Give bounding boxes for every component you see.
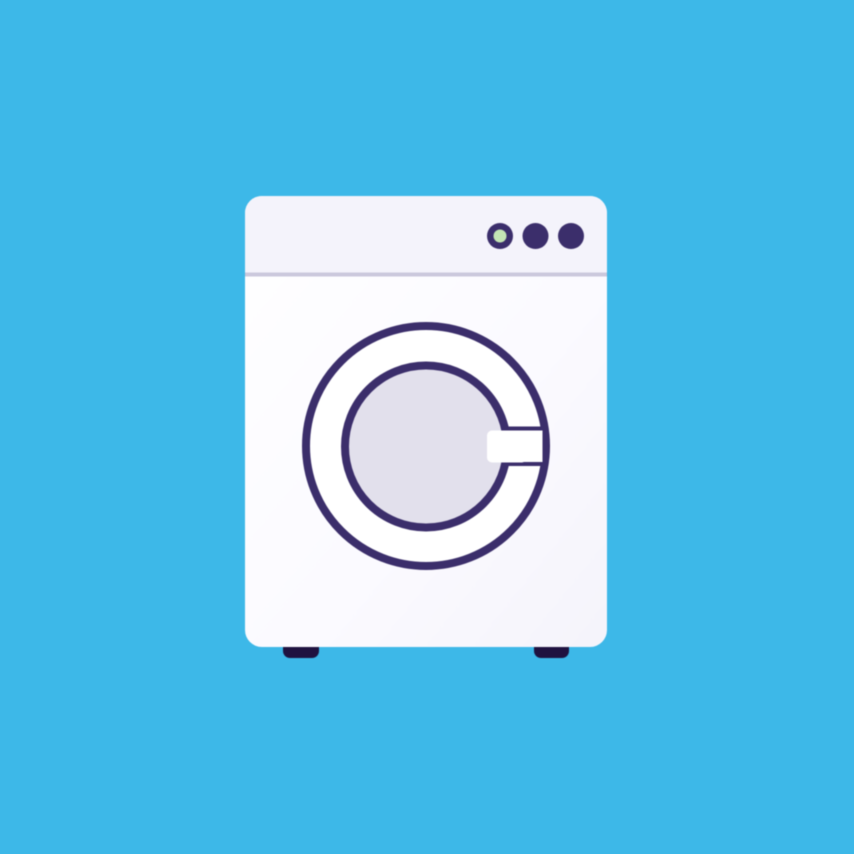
washing machine bbox=[245, 196, 607, 658]
icon: button middle bbox=[522, 223, 548, 249]
panel: control panel bbox=[245, 196, 607, 276]
icon: button right bbox=[558, 223, 584, 249]
icon: right foot bbox=[534, 640, 569, 658]
icon: left foot bbox=[283, 640, 319, 658]
door glass bbox=[345, 366, 507, 528]
icon: indicator light bbox=[487, 223, 513, 249]
door outer ring bbox=[306, 326, 546, 566]
panel: machine body bbox=[245, 196, 607, 647]
door handle bbox=[487, 426, 543, 466]
door bbox=[306, 326, 546, 566]
